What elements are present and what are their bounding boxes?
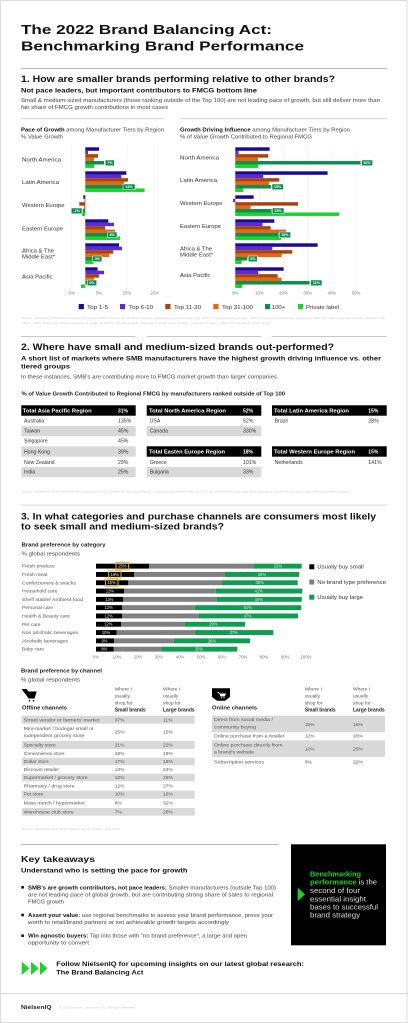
footer — [21, 1005, 136, 1011]
chart heading: pace of growth — [21, 128, 164, 140]
chart heading: pace of growth: Pace of Growth among Manufacturer Tiers by Region — [21, 128, 164, 134]
callout: benchmarking performance: bases to successful — [310, 904, 379, 911]
chart heading: growth driving influence — [180, 128, 350, 140]
table: Asia Pacific: 45% — [118, 439, 129, 445]
column headers: online: usually — [305, 694, 320, 700]
section 1 heading — [21, 74, 380, 111]
icon: triple arrows — [22, 962, 47, 975]
legend: brand preference: No brand type preference — [317, 580, 386, 586]
column headers: online: usually — [353, 694, 369, 700]
legend: manufacturer tiers: Top 11-30 — [174, 305, 201, 311]
stacked bar chart: category: 15% — [107, 580, 116, 585]
bar chart: pace of growth: 7% — [107, 161, 113, 165]
stacked bar chart: category: 25% — [118, 564, 127, 569]
icon: callout arrow — [298, 888, 305, 901]
table: offline channels: 37% — [115, 717, 125, 723]
table: Eastern Europe: 33% — [243, 470, 254, 476]
column headers: offline: Large brands — [163, 707, 195, 713]
table: Eastern Europe: Total Easten Europe Region — [149, 449, 225, 455]
region labels right: North America — [180, 156, 219, 162]
table: North America — [147, 405, 261, 436]
category labels: Personal care — [22, 605, 53, 611]
bar chart: growth driving influence: 5% — [250, 257, 256, 261]
stacked bar chart: category: 12% — [105, 605, 113, 610]
table: Asia Pacific: 39% — [118, 449, 129, 455]
title: Benchmarking Brand Performance — [21, 39, 304, 54]
column headers: offline: Where I — [163, 687, 180, 693]
follow call to action: The Brand Balancing Act — [56, 969, 144, 976]
section 2 heading: In these instances, SMB's are contributing more to FMCG market growth than larger companies — [21, 375, 278, 381]
stacked bar chart: category: 35% — [195, 647, 203, 652]
chart heading: channel: % global respondents — [21, 677, 81, 683]
table: offline channels: Warehouse club store — [24, 809, 74, 815]
stacked bar chart: category: 41% — [255, 588, 263, 593]
section 2 heading: % of Value Growth Contributed to Regional FMCG by manufacturers ranked outside of Top 100 — [22, 392, 285, 398]
table: Asia Pacific: 25% — [118, 470, 129, 476]
takeaway bullets: Assert your value: use regional benchmarks to assess your brand performance, prove your — [28, 913, 273, 919]
axis labels right: 10% — [255, 291, 264, 296]
source note 1: Source: NielsenIQ Retail Measurement Services via NIQ Quarter By Numbers Report. Latest annual period ended Q1 2022 vs. same period year ago. Note: grouping of markets by region may differ from other sources. Grocery included with — [22, 316, 386, 320]
column headers: offline — [115, 687, 195, 713]
table: offline channels: Mass merch / hypermarket — [24, 800, 85, 806]
chart heading: growth driving influence: % of Value Growth Contributed to Regional FMCG — [180, 134, 312, 140]
table: online channels: a brand's website — [214, 749, 254, 755]
table: offline channels: 12% — [115, 775, 125, 781]
takeaway bullets: SMB's are growth contributors, not pace leaders: Smaller manufacturers (outside Top 100) — [28, 885, 276, 891]
table: North America: Total North America Region — [149, 408, 226, 414]
axis labels right: 40% — [328, 291, 336, 296]
table: offline channels: 15% — [163, 729, 173, 735]
callout: benchmarking performance — [291, 844, 386, 945]
axis labels: category chart: 70% — [239, 655, 247, 660]
table: offline channels — [22, 716, 195, 816]
table: offline channels: 11% — [163, 717, 173, 723]
stacked bar chart: category: 8% — [101, 647, 108, 652]
panel: online channels — [212, 687, 385, 766]
takeaway bullets: FMCG growth — [28, 899, 64, 905]
table: online channels: 20% — [353, 734, 363, 740]
key takeaways heading — [21, 854, 187, 875]
source note 2: Source: NielsenIQ Retail Measurement Services via NIQ Quarter By Numbers Report. Latest annual period ended Q1 2022 vs. same period year ago. Note: grouping of markets by region may differ from other sources. — [22, 490, 350, 494]
axis labels right: 30% — [303, 291, 312, 296]
table: offline channels: 12% — [115, 784, 125, 790]
table: offline channels: 27% — [163, 784, 173, 790]
legend: manufacturer tiers: Private label — [306, 305, 339, 311]
column headers: offline: Small brands — [115, 707, 146, 713]
table: offline channels: Convenience store — [24, 751, 65, 757]
table: Latin America: 28% — [368, 418, 379, 424]
section 3 heading: 3. In what categories and purchase channels are consumers most likely — [21, 511, 376, 521]
source note 1: HPC. *NIQ Regional Total inclusive of UAE, S Africa, Saudi Arabia, Nigeria, Kenya, and Jordan; selected Turkey effect is included within E.EU. — [22, 321, 272, 325]
table: offline channels: 24% — [163, 767, 173, 773]
table: Asia Pacific: Hong Kong — [24, 449, 50, 455]
table: online channels: 9% — [305, 760, 312, 766]
table: Eastern Europe: Greece — [150, 460, 167, 466]
legend: manufacturer tiers: Top 6-10 — [129, 305, 153, 311]
axis labels right: 50% — [352, 291, 360, 296]
table: Asia Pacific: 135% — [118, 418, 132, 424]
region labels right: Middle East* — [180, 252, 213, 258]
region labels left: Latin America — [22, 180, 59, 186]
table: Latin America — [272, 405, 387, 424]
table: Latin America: Total Latin America Region — [274, 408, 349, 414]
table: Asia Pacific: Taiwan — [24, 429, 40, 435]
axis labels: category chart: 30% — [155, 655, 163, 660]
table: offline channels: 13% — [115, 767, 125, 773]
bar chart: pace of growth: 8% — [109, 233, 115, 237]
category labels: Household care — [22, 589, 58, 595]
table: offline channels: Street vendor or farmers' market — [24, 717, 100, 723]
callout: benchmarking performance: Benchmarking — [310, 871, 361, 878]
stacked bar chart: category: 13% — [105, 597, 114, 602]
column headers: offline: usually — [163, 694, 179, 700]
axis labels left: -5% — [67, 291, 75, 296]
category labels: Health & Beauty care — [22, 614, 70, 620]
table: offline channels: 18% — [115, 751, 125, 757]
table: online channels: community buying — [214, 724, 256, 730]
legend: brand preference: Usually buy large — [317, 595, 363, 601]
table: North America: 52% — [243, 408, 254, 414]
region labels left — [22, 158, 65, 281]
panel: offline channels: Offline channels — [22, 706, 67, 712]
section 2 heading — [21, 342, 381, 398]
follow call to action: Follow NielsenIQ for upcoming insights on our latest global research: — [56, 961, 304, 968]
region labels left: North America — [22, 158, 61, 164]
axis labels left — [67, 291, 159, 296]
axis labels left: 15% — [123, 291, 131, 296]
region labels left: Western Europe — [22, 203, 65, 209]
source note 1 — [22, 316, 386, 325]
region labels right: Asia Pacific — [180, 273, 211, 279]
table: Asia Pacific: 45% — [118, 429, 129, 435]
region labels right: Eastern Europe — [180, 224, 221, 230]
bar chart: pace of growth: -1% — [73, 209, 81, 213]
table: offline channels: 22% — [163, 743, 173, 749]
table: offline channels: 25% — [115, 729, 125, 735]
table: Eastern Europe: 18% — [243, 449, 254, 455]
table: offline channels: Pharmacy / drug store — [24, 784, 75, 790]
column headers: offline: shop for — [115, 701, 133, 707]
category labels: Non alcoholic beverages — [22, 630, 79, 636]
column headers: online: shop for — [305, 701, 323, 707]
table: Asia Pacific: Singapore — [24, 439, 48, 445]
axis labels right — [232, 291, 360, 296]
stacked bar chart: category: 12% — [104, 622, 113, 627]
axis labels: category chart: 50% — [197, 655, 205, 660]
section 2 heading: tiered groups — [21, 364, 70, 371]
bar chart: pace of growth: 13% — [125, 185, 133, 189]
section 1 heading: Small & medium-sized manufacturers (those ranking outside of the Top 100) are not leading pace of growth, but still deliver more than — [21, 98, 380, 104]
table: Asia Pacific: India — [24, 470, 35, 476]
column headers: online: shop for — [353, 701, 371, 707]
bar chart: growth driving influence: 52% — [363, 161, 371, 165]
axis labels right: 0% — [232, 291, 239, 296]
table: offline channels: 19% — [163, 751, 173, 757]
bar chart: pace of growth: 3% — [95, 257, 101, 261]
stacked bar chart: category: 12% — [105, 613, 113, 618]
chart heading: category: % global respondents — [22, 551, 81, 557]
bar chart: growth driving influence — [233, 147, 373, 288]
highlight boxes on top three small-brand values — [106, 562, 129, 586]
region labels left: Eastern Europe — [22, 226, 63, 232]
stacked bar chart: category: 10% — [102, 630, 110, 635]
table: online channels: Online purchase from a retailer — [214, 734, 285, 740]
takeaway bullets: worth to retail/brand partners or set achievable growth targets accordingly — [28, 920, 230, 926]
legend: brand preference: Usually buy small — [317, 565, 364, 571]
table: offline channels: 16% — [163, 792, 173, 798]
stacked bar chart: category: 47% — [244, 613, 252, 618]
column headers: online: Small brands — [305, 707, 336, 713]
axis labels: category chart: 10% — [113, 655, 121, 660]
chart heading: category — [22, 543, 106, 557]
table: offline channels: 7% — [115, 809, 122, 815]
table: online channels: 12% — [305, 734, 315, 740]
stacked bar chart: category: 18% — [111, 572, 119, 577]
column headers: offline: shop for — [163, 701, 181, 707]
takeaway bullets: are not leading pace of global growth, but are contributing strong share of sales to regional — [28, 892, 273, 898]
axis labels: category chart: 40% — [176, 655, 184, 660]
table: online channels: Subscription services — [214, 760, 265, 766]
callout: benchmarking performance: essential insight — [310, 896, 366, 903]
stacked bar chart: category: 40% — [255, 597, 263, 602]
bar chart: pace of growth — [71, 147, 145, 288]
stacked bar chart: category — [96, 564, 302, 652]
table: online channels: 15% — [305, 722, 315, 728]
footer: NielsenIQ — [21, 1005, 52, 1011]
table: online channels: 22% — [353, 760, 363, 766]
category labels: Alcoholic beverages — [22, 638, 69, 644]
table: offline channels: 16% — [163, 759, 173, 765]
table: North America: 330% — [243, 429, 257, 435]
title — [21, 22, 304, 54]
stacked bar chart: category: 13% — [106, 588, 114, 593]
category labels: Fresh meat — [22, 572, 48, 578]
chart heading: channel — [21, 668, 103, 683]
table: North America: 52% — [243, 418, 254, 424]
title: The 2022 Brand Balancing Act: — [21, 22, 272, 37]
table: Asia Pacific — [21, 405, 136, 477]
panel: online channels: Online channels — [212, 706, 257, 712]
stacked bar chart: category: 37% — [230, 630, 238, 635]
region labels left: Africa & The — [22, 249, 54, 255]
column headers: online: Where I — [305, 687, 322, 693]
axis labels: category chart: 20% — [134, 655, 142, 660]
legend: manufacturer tiers: 100+ — [272, 305, 285, 311]
chart heading: pace of growth: % Value Growth — [21, 134, 63, 140]
takeaway bullets — [21, 885, 276, 947]
chart heading: growth driving influence: Growth Driving Influence among Manufacturer Tiers by Region — [180, 128, 350, 134]
table: offline channels: independent grocery store — [24, 733, 85, 739]
table: offline channels: Discount retailer — [24, 767, 59, 773]
chart heading: channel: Brand preference by channel — [21, 668, 103, 674]
stacked bar chart: category: 51% — [244, 605, 252, 610]
legend: manufacturer tiers: Top 1-5 — [87, 305, 108, 311]
table: Eastern Europe: 101% — [243, 460, 257, 466]
panel: growth driving influence chart — [180, 128, 373, 296]
table: online channels: 16% — [353, 722, 363, 728]
column headers: online: Where I — [353, 687, 370, 693]
table: Asia Pacific: 31% — [118, 408, 129, 414]
section 1 heading: Not pace leaders, but important contributors to FMCG bottom line — [21, 88, 257, 94]
table: offline channels: Mini-market / bodega/ small or — [24, 726, 94, 732]
region labels right — [180, 156, 223, 279]
axis labels: category chart: 60% — [218, 655, 226, 660]
callout: benchmarking performance: performance is the — [310, 880, 377, 887]
table: Western Europe: 15% — [368, 449, 379, 455]
callout: benchmarking performance: brand strategy — [310, 912, 361, 919]
table: offline channels: 21% — [115, 743, 125, 749]
table: offline channels: Dollar store — [24, 759, 49, 765]
region labels right: Western Europe — [180, 201, 223, 207]
panel: brand preference by category — [22, 543, 386, 660]
table: Asia Pacific: New Zealand — [24, 460, 55, 466]
table: offline channels: 8% — [115, 800, 122, 806]
takeaway bullets: Win agnostic buyers: Tap into those with "no brand preference", a large and open — [28, 934, 247, 940]
table: Eastern Europe — [147, 446, 261, 477]
table: offline channels: Specialty store — [24, 743, 56, 749]
stacked bar chart: category: 38% — [256, 580, 264, 585]
table: Asia Pacific: 29% — [118, 460, 129, 466]
panel: offline channels — [21, 668, 195, 816]
bar chart: growth driving influence: 15% — [274, 185, 282, 189]
table: online channels: Direct from social media / — [214, 717, 274, 723]
axis labels: category chart: 100% — [300, 655, 312, 660]
legend: manufacturer tiers — [79, 304, 339, 311]
table: offline channels: 17% — [115, 759, 125, 765]
axis labels right: 20% — [279, 291, 288, 296]
key takeaways heading: Key takeaways — [21, 854, 95, 864]
table: offline channels: 10% — [115, 792, 125, 798]
column headers: offline: usually — [115, 694, 130, 700]
bar chart: growth driving influence: 31% — [313, 281, 321, 285]
table: Western Europe: 141% — [368, 460, 382, 466]
stacked bar chart: category: 29% — [209, 622, 218, 627]
panel: pace of growth chart — [21, 128, 164, 296]
axis labels left: 5% — [96, 291, 102, 296]
table: online channels: 12% — [305, 747, 315, 753]
region labels right: Africa & The — [180, 247, 212, 253]
section 3 heading: to seek small and medium-sized brands? — [21, 521, 224, 531]
section 2 heading: A short list of markets where SMB manufacturers have the highest growth driving influence vs. other — [21, 355, 381, 362]
section 1 heading: fair share of FMCG growth contributions in most cases — [21, 105, 169, 111]
section 3 heading — [21, 511, 376, 531]
region labels left: Middle East* — [22, 254, 55, 260]
category labels: Pet care — [22, 622, 41, 628]
source note 3: Source: NielsenIQ 2022 Brand Balancing Act Survey, May 2022 — [22, 827, 121, 831]
table: offline channels: 26% — [163, 775, 173, 781]
legend: brand preference — [309, 564, 386, 601]
column headers: online: Large brands — [353, 707, 385, 713]
category labels — [22, 564, 83, 653]
section 2 heading: 2. Where have small and medium-sized brands out-performed? — [21, 342, 334, 352]
table: online channels — [212, 716, 385, 766]
table: Asia Pacific: Total Asia Pacific Region — [23, 408, 92, 414]
bar chart: growth driving influence: 18% — [281, 233, 289, 237]
callout: benchmarking performance: second of four — [310, 888, 361, 895]
category labels: Fresh produce — [22, 564, 55, 570]
table: North America: USA — [150, 418, 161, 424]
stacked bar chart: category: 9% — [102, 638, 108, 643]
key takeaways heading: Understand who is setting the pace for growth — [21, 868, 187, 875]
region labels right: Latin America — [180, 178, 217, 184]
axis labels left: 25% — [150, 291, 159, 296]
axis labels: category chart: 90% — [281, 655, 289, 660]
chart heading: category: Brand preference by category — [22, 543, 106, 549]
axis labels: category chart: 0% — [93, 655, 99, 660]
table: online channels: Online purchase directly from — [214, 742, 282, 748]
follow call to action — [56, 961, 304, 976]
bar chart: pace of growth: 0% — [89, 281, 95, 285]
category labels: Shelf stable/ Ambient food — [22, 597, 83, 603]
category labels: Baby care — [22, 647, 44, 653]
category labels: Confectionery & snacks — [22, 580, 77, 586]
table: Latin America: Brazil — [275, 418, 288, 424]
icon: online cart — [212, 688, 230, 701]
table: North America: Canada — [150, 429, 168, 435]
legend: manufacturer tiers: Top 31-100 — [222, 305, 253, 311]
axis labels: category chart: 80% — [260, 655, 268, 660]
table: Eastern Europe: Bulgaria — [150, 470, 169, 476]
takeaway bullets: opportunity to convert — [28, 941, 90, 947]
stacked bar chart: category: 36% — [258, 572, 266, 577]
stacked bar chart: category: 36% — [208, 638, 216, 643]
table: offline channels: Supermarket / grocery store — [24, 775, 88, 781]
table: Western Europe: Netherlands — [275, 460, 303, 466]
table: online channels: 25% — [353, 747, 363, 753]
table: Asia Pacific: Australia — [24, 418, 44, 424]
table: Latin America: 15% — [368, 408, 379, 414]
column headers: online — [305, 687, 385, 713]
table: offline channels: 28% — [163, 809, 173, 815]
icon: shopping cart — [22, 689, 37, 702]
table: Western Europe — [272, 446, 387, 466]
bar chart: growth driving influence: 15% — [274, 209, 282, 213]
table: offline channels: 32% — [163, 800, 173, 806]
axis labels: category chart — [93, 655, 312, 660]
region labels left: Asia Pacific — [22, 275, 53, 281]
column headers: offline: Where I — [115, 687, 132, 693]
section 1 heading: 1. How are smaller brands performing relative to other brands? — [21, 74, 335, 84]
table: Western Europe: Total Western Europe Region — [274, 449, 355, 455]
table: offline channels: Pet store — [24, 792, 44, 798]
footer: © 2022 Nielsen Consumer LLC. All rights reserved. — [59, 1006, 136, 1010]
stacked bar chart: category: 22% — [274, 564, 282, 569]
